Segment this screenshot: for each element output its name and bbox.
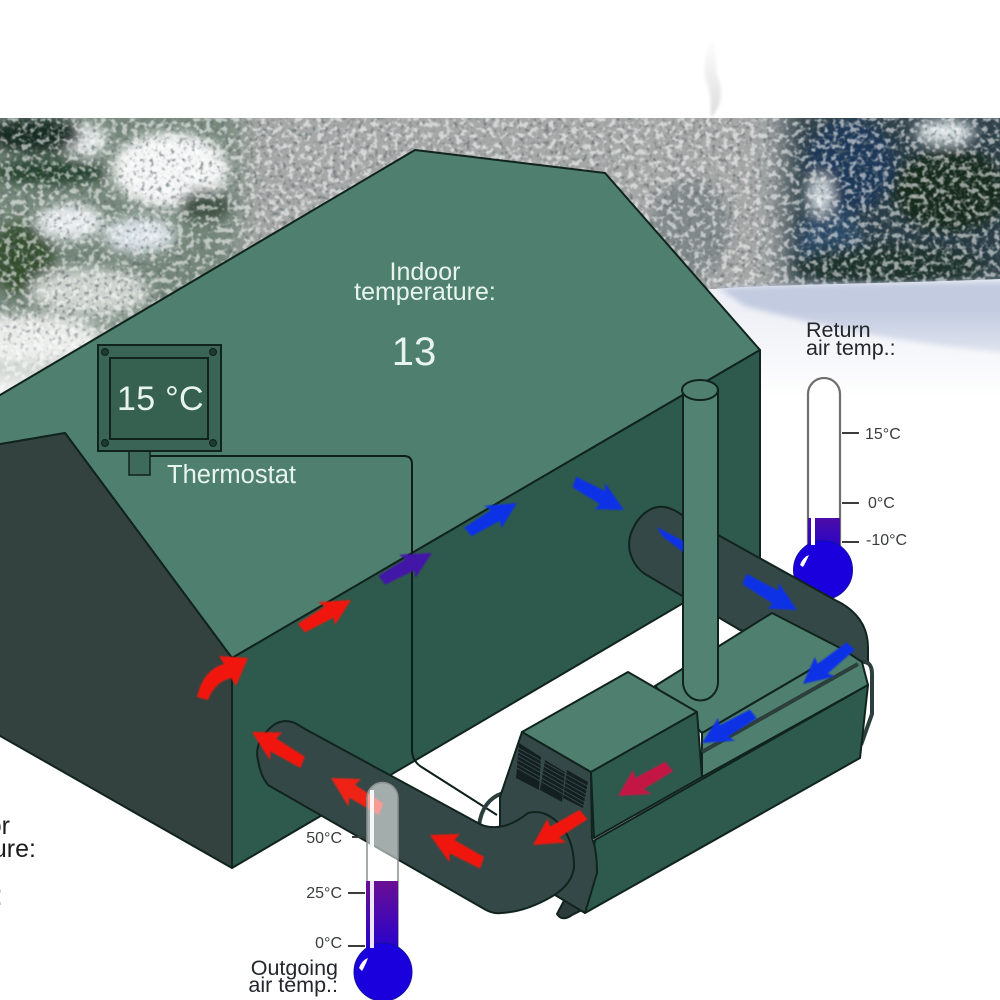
- gable end wall: [0, 433, 232, 868]
- indoor temperature label: temperature:: [354, 278, 496, 306]
- thermostat display: [110, 358, 208, 439]
- blue arrow entering duct: [657, 527, 683, 552]
- heater left handle: [479, 793, 503, 838]
- heater foot: [557, 897, 582, 918]
- scale ticks and values: 15°C: [865, 426, 901, 443]
- scale ticks and values: [842, 426, 907, 549]
- tick marks and values: 50°C: [306, 830, 342, 847]
- thermostat: [98, 345, 221, 475]
- indoor temperature value: 13: [392, 330, 436, 374]
- thermostat label: Thermostat: [167, 461, 296, 489]
- bulb highlight: [359, 958, 368, 971]
- tube highlight: [370, 790, 374, 948]
- scale ticks and values: 0°C: [868, 495, 895, 512]
- long side wall: [232, 350, 760, 868]
- red arrow in duct lower: [423, 822, 490, 876]
- heater end housing: [500, 732, 597, 913]
- thermostat reading: 15 °C: [117, 380, 204, 418]
- airflow arrows: [197, 469, 860, 876]
- tick marks and values: 25°C: [306, 885, 342, 902]
- blue arrow in duct: [737, 566, 804, 622]
- red arrow in duct middle: [323, 765, 390, 823]
- blue arrow at elbow: [794, 635, 860, 695]
- thermostat screws: [102, 348, 216, 446]
- rail stripe: [702, 664, 858, 752]
- right thermometer: return air temp: [794, 318, 907, 600]
- tick marks and values: [306, 830, 366, 952]
- heater handle right: [848, 662, 872, 745]
- red arrow to duct: [525, 801, 592, 858]
- heater top plate: [655, 613, 844, 733]
- tick marks and values: 0°C: [315, 935, 342, 952]
- thermostat case: [98, 345, 221, 451]
- fluid column: [366, 881, 398, 961]
- return air label: air temp.:: [806, 336, 896, 360]
- return air label: Return: [806, 318, 871, 342]
- flue pipe: [682, 380, 718, 701]
- blue arrow over wall: [567, 469, 631, 522]
- heater grille: [516, 743, 589, 808]
- heater box front: [591, 712, 702, 838]
- snowy forest photo: [0, 118, 1000, 394]
- return duct: [629, 507, 868, 664]
- red curved arrow: [197, 656, 248, 700]
- blue arrow on wall: [460, 491, 524, 544]
- crimson arrow on box: [610, 753, 677, 809]
- blue arrow on plate: [695, 702, 761, 755]
- thermostat sensor: [129, 451, 150, 475]
- heater lower body: [585, 685, 868, 913]
- left thermometer: outgoing air temp: [248, 782, 412, 1000]
- smoke wisp: [705, 38, 721, 118]
- house: [0, 150, 760, 868]
- red arrow at duct end: [244, 719, 311, 776]
- purple arrow: [374, 541, 439, 593]
- indoor temperature label: Indoor: [390, 258, 460, 286]
- red arrow on wall: [293, 588, 358, 640]
- thermostat wire: [150, 456, 497, 815]
- bulb: [354, 943, 412, 1000]
- heater unit: [479, 613, 872, 918]
- outgoing duct: [257, 721, 574, 913]
- scale ticks and values: -10°C: [866, 532, 907, 549]
- outgoing label: air temp.:: [248, 973, 338, 997]
- outgoing label: Outgoing: [251, 956, 338, 980]
- thermometer glass and fluid: [794, 378, 852, 600]
- roof: [0, 150, 760, 658]
- glass tube: [367, 782, 398, 975]
- heater side rail: [702, 650, 868, 777]
- heater box top: [522, 672, 697, 772]
